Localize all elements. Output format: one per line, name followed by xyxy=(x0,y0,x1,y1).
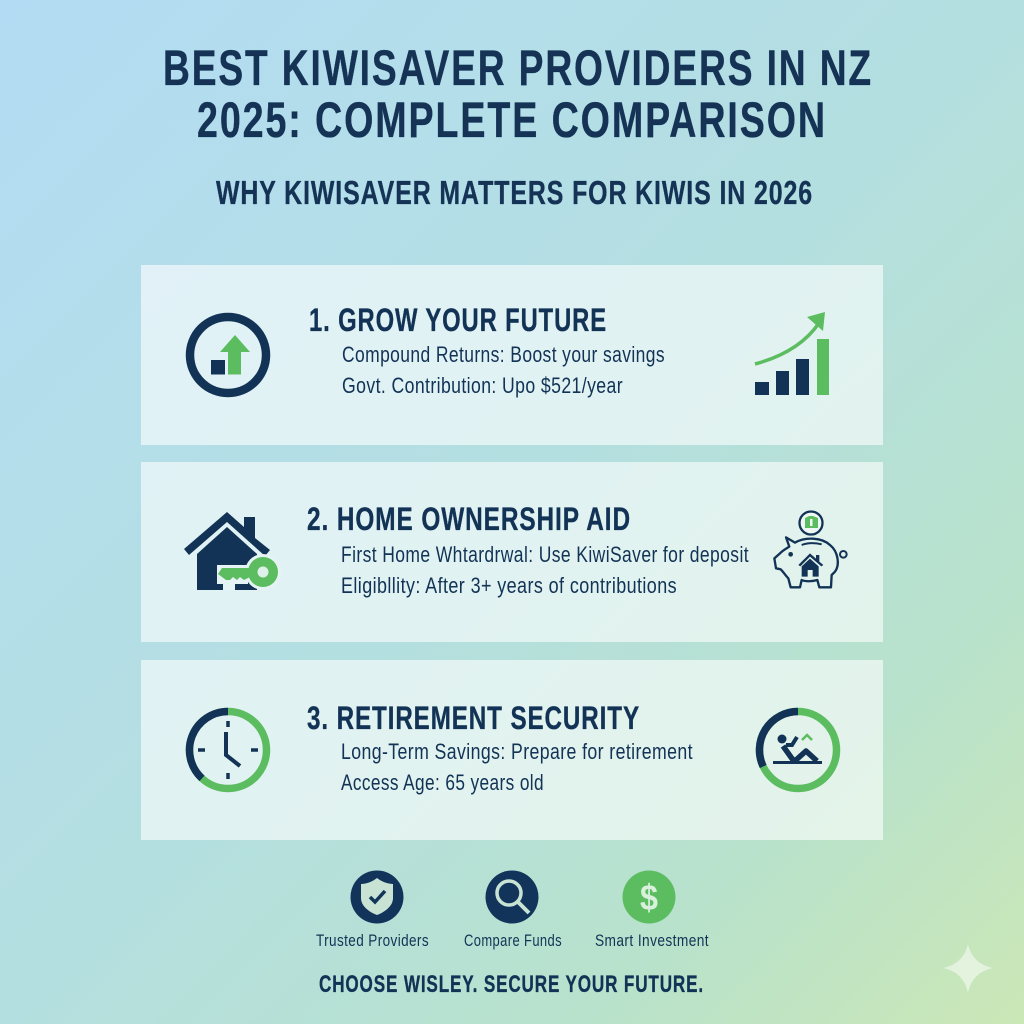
heading: retirement security: 3. RETIREMENT SECURITY xyxy=(307,700,640,736)
icon: relaxing figure in ring xyxy=(759,712,836,788)
badge: compare funds: Compare Funds xyxy=(464,931,562,950)
icon: growth arrow in ring xyxy=(190,317,266,393)
title: 2025: COMPLETE COMPARISON xyxy=(197,92,827,148)
heading: home ownership aid: 2. HOME OWNERSHIP AID xyxy=(307,501,631,537)
icon: piggy bank with coin xyxy=(774,512,847,587)
panel: retirement security xyxy=(141,660,883,840)
badge: smart investment: Smart Investment xyxy=(595,931,709,950)
icon: house with key xyxy=(184,512,281,590)
panel: grow your future xyxy=(141,265,883,445)
icon: bar chart with arrow xyxy=(755,312,829,395)
badge: smart investment: $ xyxy=(640,877,658,918)
badge: trusted providers: Trusted Providers xyxy=(316,931,429,950)
text: eligibility: Eligibllity: After 3+ years of contributions xyxy=(341,573,677,598)
text: access age: Access Age: 65 years old xyxy=(341,770,544,795)
heading: grow your future: 1. GROW YOUR FUTURE xyxy=(309,302,607,338)
text: long-term savings: Long-Term Savings: Prepare for retirement xyxy=(341,739,693,764)
icon: clock xyxy=(189,712,266,788)
icon: sparkle xyxy=(943,944,993,993)
text: first home withdrawal: First Home Whtardrwal: Use KiwiSaver for deposit xyxy=(341,542,749,567)
tagline: CHOOSE WISLEY. SECURE YOUR FUTURE. xyxy=(319,971,704,998)
text: govt contribution: Govt. Contribution: Upo $521/year xyxy=(342,373,623,398)
subtitle: WHY KIWISAVER MATTERS FOR KIWIS IN 2026 xyxy=(216,174,813,211)
badge: compare funds xyxy=(464,870,562,950)
panel: home ownership aid xyxy=(141,462,883,642)
text: compound returns: Compound Returns: Boost your savings xyxy=(342,342,665,367)
title xyxy=(163,40,873,148)
badge: trusted providers xyxy=(316,870,429,950)
badge: smart investment xyxy=(595,870,709,950)
